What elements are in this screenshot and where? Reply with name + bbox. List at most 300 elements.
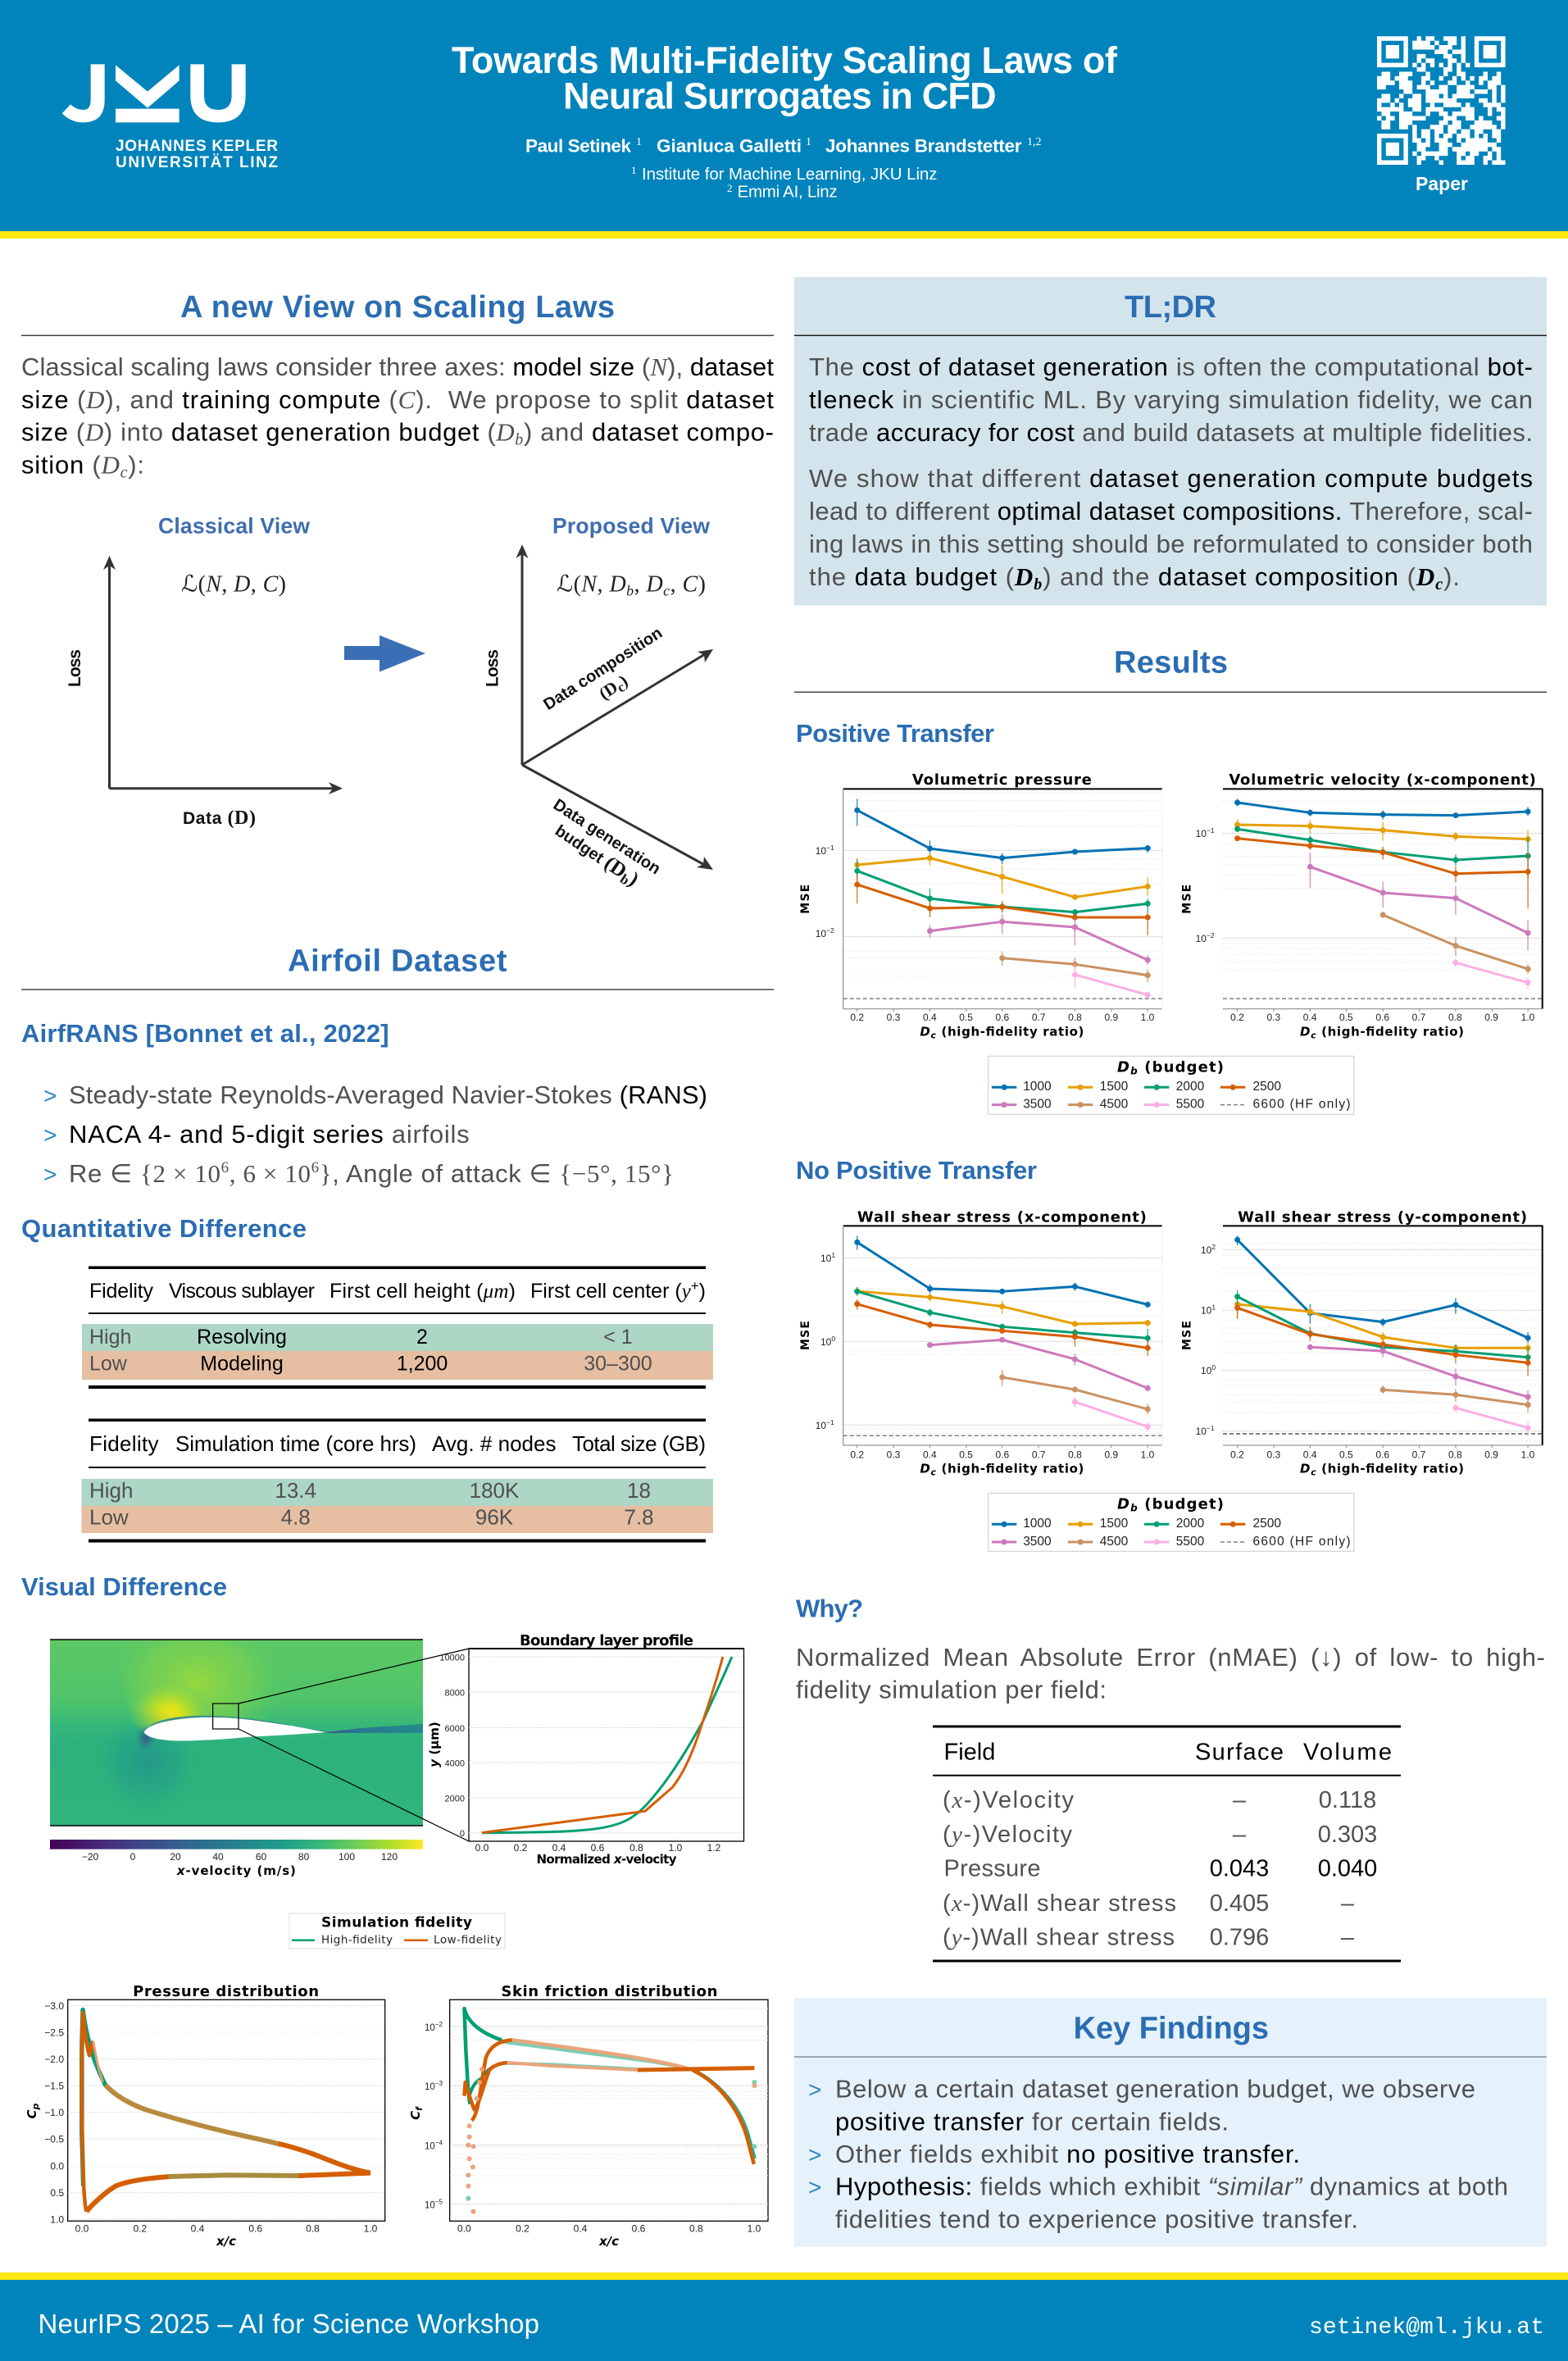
subheading: quantitative difference: Quantitative Difference — [21, 1214, 307, 1243]
bullet list: > — [43, 1122, 57, 1148]
chart: skin friction distribution: f — [414, 2106, 425, 2111]
bullet list: > — [808, 2142, 821, 2168]
chart: volumetric velocity: 0.2 — [1230, 1012, 1244, 1023]
chart: volumetric velocity: (high-fidelity ratio) — [1316, 1024, 1464, 1039]
chart: wall shear stress y: 1.0 — [1521, 1449, 1535, 1460]
legend: budget (positive transfer): 3500 — [1023, 1098, 1052, 1112]
diagram: proposed view: Loss — [484, 649, 502, 687]
subheading: no positive transfer: No Positive Transfer — [796, 1156, 1037, 1185]
chart: pressure distribution: 0.0 — [50, 2161, 64, 2172]
text block: lead to different optimal dataset compositions. Therefore, scal- — [809, 497, 1533, 525]
text block: c — [1435, 575, 1443, 594]
legend: budget (positive transfer): 1000 — [1023, 1080, 1052, 1094]
text block: intro: Classical scaling laws consider three axes: model size (N), dataset — [21, 353, 774, 381]
chart: wall shear stress y: 0.9 — [1484, 1449, 1498, 1460]
chart: pressure distribution: 0.6 — [248, 2223, 262, 2235]
footer banner — [0, 2272, 1568, 2361]
chart: pressure distribution — [25, 1983, 385, 2249]
table: mesh resolution: Fidelity — [89, 1280, 154, 1303]
text block: the data budget (D — [809, 562, 1033, 591]
chart: wall shear stress x: 0.2 — [850, 1449, 864, 1460]
legend: budget (no positive transfer): 3500 — [1023, 1535, 1052, 1549]
legend: budget (no positive transfer): 5500 — [1176, 1535, 1205, 1549]
heading: A new View on Scaling Laws — [180, 290, 615, 325]
chart: boundary layer profile: 0.6 — [591, 1842, 605, 1854]
table: nMAE per field: 0.303 — [1318, 1822, 1377, 1848]
chart: volumetric pressure: 0.5 — [959, 1012, 973, 1023]
affiliations — [631, 164, 938, 202]
chart: pressure distribution: 0.2 — [133, 2223, 147, 2235]
legend: budget (no positive transfer): 4500 — [1100, 1535, 1129, 1549]
chart: boundary layer profile: 4000 — [445, 1759, 465, 1769]
chart: wall shear stress x: 0.8 — [1068, 1449, 1082, 1460]
colorbar — [50, 1840, 423, 1878]
text block: intro: and dataset compo- — [540, 418, 774, 446]
legend: budget (positive transfer): 2000 — [1176, 1080, 1205, 1094]
chart: wall shear stress y: 0.5 — [1339, 1449, 1353, 1460]
chart: boundary layer profile: 2000 — [445, 1794, 465, 1804]
chart: wall shear stress y — [1180, 1209, 1543, 1478]
chart: wall shear stress y: D — [1300, 1462, 1316, 1478]
bullet list: NACA 4- and 5-digit series airfoils — [69, 1120, 470, 1149]
panel: TL;DR — [794, 277, 1547, 606]
chart: volumetric velocity: 0.4 — [1303, 1012, 1317, 1023]
chart: wall shear stress y: c — [1311, 1467, 1316, 1478]
chart: skin friction distribution: 0.4 — [574, 2223, 588, 2235]
legend: budget (no positive transfer): (budget) — [1139, 1496, 1224, 1513]
legend: budget (no positive transfer): 2500 — [1252, 1517, 1281, 1531]
chart: volumetric pressure: 0.4 — [923, 1012, 937, 1023]
chart: skin friction distribution: 0.6 — [632, 2223, 646, 2235]
chart: volumetric velocity: 0.3 — [1266, 1012, 1280, 1023]
title: Towards Multi-Fidelity Scaling Laws of — [452, 39, 1118, 81]
table: nMAE per field: Volume — [1303, 1740, 1392, 1766]
table: mesh resolution: Resolving — [197, 1326, 287, 1349]
icon: QR code — [1377, 39, 1506, 194]
diagram: proposed view: b — [626, 583, 634, 599]
panel: key findings — [794, 1998, 1547, 2247]
diagram: classical view: ℒ(N, D, C) — [181, 572, 286, 598]
chart: volumetric pressure: c — [930, 1030, 936, 1040]
title: Neural Surrogates in CFD — [563, 75, 997, 116]
table: nMAE per field: – — [1233, 1822, 1247, 1848]
chart: wall shear stress x: 0.9 — [1104, 1449, 1118, 1460]
chart: volumetric pressure: 0.2 — [850, 1012, 864, 1023]
chart: boundary layer profile: 0.0 — [475, 1842, 489, 1854]
table: simulation cost: Low — [89, 1505, 129, 1530]
chart: volumetric pressure: 10 — [816, 845, 826, 857]
bullet list: Hypothesis: fields which exhibit “similar” dynamics at both — [835, 2172, 1508, 2200]
text block: intro: b — [515, 431, 523, 449]
chart: volumetric velocity: 10 — [1196, 828, 1207, 839]
chart: volumetric velocity — [1180, 771, 1543, 1040]
legend: simulation fidelity: Low-fidelity — [434, 1934, 502, 1947]
panel: results — [794, 645, 1547, 1963]
chart: wall shear stress y: 0 — [1211, 1363, 1216, 1372]
chart: boundary layer profile: 8000 — [445, 1689, 465, 1699]
chart: wall shear stress y: 1 — [1211, 1303, 1216, 1312]
legend: budget (no positive transfer): 1500 — [1100, 1517, 1129, 1531]
chart: skin friction distribution: 0.2 — [516, 2223, 529, 2235]
heading: TL;DR — [1125, 290, 1216, 325]
table: mesh resolution: Low — [89, 1353, 128, 1376]
chart: boundary layer profile: 0.2 — [514, 1842, 528, 1854]
heading: Key Findings — [1074, 2012, 1269, 2046]
authors: Gianluca Galletti — [657, 136, 802, 157]
table: nMAE per field: 0.040 — [1318, 1856, 1377, 1882]
text block: b — [1034, 575, 1042, 594]
chart: pressure distribution: 0.4 — [191, 2223, 205, 2235]
chart: pressure distribution: −1.5 — [44, 2081, 64, 2092]
diagram: proposed view: Proposed View — [552, 513, 710, 538]
colorbar: 40 — [212, 1851, 224, 1863]
chart: boundary layer profile: 0.8 — [629, 1842, 643, 1854]
chart: wall shear stress x: 1.0 — [1141, 1449, 1155, 1460]
bullet list: Below a certain dataset generation budget, we observe — [835, 2074, 1475, 2104]
table: simulation cost: 7.8 — [624, 1505, 654, 1530]
colorbar: 120 — [381, 1851, 398, 1863]
text block: We show that different dataset generation compute budgets — [809, 464, 1533, 493]
chart: wall shear stress x: 0.4 — [923, 1449, 937, 1460]
legend: budget (no positive transfer): 1000 — [1023, 1517, 1052, 1531]
legend: budget (positive transfer): D — [1117, 1059, 1138, 1077]
chart: wall shear stress y: 0.7 — [1412, 1449, 1426, 1460]
panel: a new view on scaling laws — [21, 290, 774, 892]
table: mesh resolution — [82, 1266, 713, 1389]
chart: skin friction distribution: −5 — [435, 2199, 443, 2205]
chart: boundary layer profile: 0 — [460, 1829, 465, 1839]
table: nMAE per field: (x-)Velocity — [943, 1787, 1074, 1813]
icon: JKU logo: JOHANNES KEPLER — [116, 138, 278, 155]
chart: skin friction distribution: −3 — [435, 2080, 443, 2087]
chart: volumetric velocity: Volumetric velocity (x-component) — [1229, 771, 1536, 789]
diagram: classical view — [66, 513, 343, 829]
chart: skin friction distribution: x/c — [598, 2234, 619, 2249]
diagram: proposed view: C) — [683, 572, 706, 598]
chart: volumetric pressure: (high-fidelity ratio) — [937, 1024, 1084, 1039]
chart: pressure distribution: −1.0 — [44, 2107, 64, 2118]
legend: simulation fidelity — [289, 1913, 505, 1949]
legend: budget (positive transfer): 2500 — [1252, 1080, 1281, 1094]
heading: Airfoil Dataset — [288, 944, 507, 979]
bullet list: Re ∈ {2 × 10 — [69, 1159, 220, 1188]
text block: intro: sition (D — [21, 451, 120, 479]
chart: skin friction distribution: 10 — [425, 2082, 435, 2092]
table: nMAE per field: 0.405 — [1210, 1890, 1269, 1917]
chart: skin friction distribution: 0.8 — [689, 2223, 703, 2235]
bullet list: > — [43, 1083, 57, 1108]
text block: ) — [1043, 562, 1052, 591]
chart: volumetric pressure: 1.0 — [1141, 1012, 1155, 1023]
bullet list — [43, 1080, 707, 1188]
table: simulation cost: 4.8 — [281, 1505, 311, 1530]
chart: wall shear stress y: 10 — [1201, 1244, 1211, 1256]
chart: wall shear stress y: 2 — [1211, 1243, 1216, 1251]
text block — [809, 353, 1533, 594]
chart: wall shear stress y: 10 — [1201, 1305, 1211, 1317]
chart: wall shear stress x: 0.3 — [887, 1449, 901, 1460]
diagram: classical view: Data (D) — [183, 807, 256, 829]
chart: wall shear stress y: 0.8 — [1448, 1449, 1462, 1460]
diagram: proposed view: ) — [616, 671, 631, 690]
table: simulation cost: Fidelity — [89, 1431, 159, 1456]
chart: wall shear stress y: 0.6 — [1375, 1449, 1389, 1460]
legend: budget (no positive transfer): 6600 (HF only) — [1252, 1535, 1351, 1549]
chart: pressure distribution: −3.0 — [44, 2000, 64, 2012]
chart: skin friction distribution: −4 — [435, 2140, 443, 2146]
text block: intro: c — [120, 464, 128, 482]
text block: intro: size (D) into dataset generation budget (D — [21, 418, 515, 446]
subheading: why: Why? — [796, 1594, 863, 1623]
chart: wall shear stress x: 10 — [820, 1253, 831, 1264]
chart: volumetric velocity: D — [1300, 1024, 1316, 1040]
table: nMAE per field: 0.796 — [1210, 1925, 1269, 1951]
chart: wall shear stress x: 0.7 — [1032, 1449, 1046, 1460]
authors: 1,2 — [1027, 136, 1041, 148]
chart: pressure distribution: 1.0 — [50, 2213, 64, 2225]
title — [452, 39, 1118, 116]
table: simulation cost: Avg. # nodes — [432, 1431, 556, 1456]
colorbar: x-velocity (m/s) — [176, 1863, 296, 1878]
table: simulation cost: 18 — [627, 1478, 651, 1503]
bullet list: } — [320, 1159, 332, 1188]
inset box and zoom lines — [213, 1649, 469, 1841]
chart: skin friction distribution: 10 — [425, 2023, 435, 2033]
table: nMAE per field: Field — [944, 1740, 995, 1766]
chart: pressure distribution: Pressure distribution — [133, 1983, 319, 2000]
bullet list: positive transfer for certain fields. — [835, 2107, 1229, 2136]
diagram: classical view: Classical View — [158, 513, 310, 538]
chart: wall shear stress x: D — [920, 1462, 936, 1478]
table: nMAE per field: (x-)Wall shear stress — [943, 1890, 1176, 1917]
chart: boundary layer profile: 1.0 — [669, 1842, 683, 1854]
text block: and the dataset composition (D — [1060, 562, 1434, 591]
table: nMAE per field: (y-)Wall shear stress — [943, 1925, 1175, 1951]
colorbar: 20 — [170, 1851, 181, 1863]
affiliations: 1 — [631, 164, 636, 176]
chart: wall shear stress y: (high-fidelity ratio) — [1316, 1462, 1464, 1476]
table: mesh resolution: 30–300 — [584, 1353, 652, 1376]
bullet list: Other fields exhibit no positive transfer. — [835, 2140, 1300, 2168]
chart: volumetric velocity: 10 — [1196, 933, 1207, 944]
legend: budget (positive transfer) — [989, 1056, 1354, 1114]
chart: pressure distribution: C — [25, 2109, 39, 2118]
chart: wall shear stress x: 0.6 — [996, 1449, 1010, 1460]
table: mesh resolution: ) — [699, 1280, 706, 1303]
header banner — [0, 0, 1568, 239]
legend: budget (no positive transfer): b — [1130, 1503, 1138, 1514]
table: simulation cost: 180K — [470, 1478, 520, 1503]
legend: budget (positive transfer): 1500 — [1100, 1080, 1129, 1094]
chart: skin friction distribution: 10 — [425, 2200, 435, 2210]
text block: ing laws in this setting should be reformulated to consider both — [809, 530, 1533, 558]
text block: nMAE intro: fidelity simulation per field: — [796, 1676, 1107, 1704]
chart: skin friction distribution: 10 — [425, 2141, 435, 2151]
table: nMAE per field: Pressure — [944, 1856, 1041, 1882]
chart: pressure distribution: 0.0 — [75, 2223, 89, 2235]
chart: volumetric velocity: c — [1311, 1030, 1316, 1040]
chart: skin friction distribution: 0.0 — [457, 2223, 471, 2235]
colorbar: 100 — [339, 1851, 355, 1863]
chart: volumetric velocity: 0.9 — [1484, 1012, 1498, 1023]
diagram: proposed view: , — [670, 572, 682, 598]
chart: wall shear stress x: 0 — [831, 1335, 835, 1343]
chart: pressure distribution: 1.0 — [364, 2223, 378, 2235]
table: mesh resolution: Modeling — [200, 1353, 284, 1376]
heading: Results — [1114, 645, 1228, 680]
text block: intro: size (D), and training compute (C). We propose to split dataset — [21, 385, 774, 414]
chart: skin friction distribution — [408, 1983, 768, 2249]
chart: volumetric pressure: −2 — [826, 926, 834, 935]
chart: volumetric pressure: −1 — [826, 844, 834, 852]
bullet list: > — [808, 2174, 821, 2200]
chart: volumetric velocity: −1 — [1207, 826, 1215, 835]
subheading: positive transfer: Positive Transfer — [796, 719, 994, 748]
authors: 1 — [806, 136, 811, 148]
diagram: proposed view: D — [645, 572, 670, 599]
icon: JKU logo — [62, 64, 278, 171]
chart: volumetric pressure: 0.7 — [1032, 1012, 1046, 1023]
chart: wall shear stress x: (high-fidelity ratio) — [937, 1462, 1084, 1476]
chart: volumetric pressure: 0.6 — [996, 1012, 1010, 1023]
chart: boundary layer profile: 0.4 — [552, 1842, 566, 1854]
text block: ). — [1443, 562, 1460, 591]
chart: wall shear stress y: 0.3 — [1266, 1449, 1280, 1460]
chart: skin friction distribution: −2 — [435, 2021, 443, 2028]
chart: volumetric pressure: 0.3 — [887, 1012, 901, 1023]
arrow: classical to proposed — [344, 635, 425, 672]
diagram: proposed view: c — [614, 679, 628, 696]
chart: boundary layer profile: Normalized x-velocity — [536, 1852, 677, 1867]
diagram: proposed view: Data composition — [540, 624, 666, 714]
bullet list: Steady-state Reynolds-Averaged Navier-Stokes (RANS) — [69, 1080, 707, 1109]
diagram: proposed view — [484, 513, 713, 892]
chart: boundary layer profile: 6000 — [445, 1724, 465, 1734]
chart: pressure distribution: −2.5 — [44, 2027, 64, 2038]
bullet list: , Angle of attack ∈ {−5°, 15°} — [332, 1159, 674, 1188]
authors: Paul Setinek — [525, 136, 631, 157]
authors: Johannes Brandstetter — [825, 136, 1022, 157]
table: simulation cost: High — [89, 1478, 133, 1503]
subheading: airfrans: AirfRANS [Bonnet et al., 2022] — [21, 1019, 389, 1048]
chart: wall shear stress y: MSE — [1180, 1321, 1193, 1350]
table: mesh resolution: Viscous sublayer — [169, 1280, 315, 1303]
authors: 1 — [636, 136, 642, 148]
table: simulation cost — [82, 1418, 713, 1543]
table: mesh resolution: 2 — [416, 1326, 428, 1349]
subheading: visual difference: Visual Difference — [21, 1572, 227, 1601]
colorbar: 0 — [130, 1851, 136, 1863]
footer: conference: NeurIPS 2025 – AI for Science Workshop — [38, 2309, 539, 2339]
diagram: classical view: Loss — [66, 649, 84, 687]
diagram: proposed view: ) — [625, 868, 643, 891]
chart: pressure distribution: x/c — [216, 2234, 236, 2249]
table: nMAE per field: 0.118 — [1319, 1787, 1376, 1813]
chart: volumetric velocity: 0.6 — [1375, 1012, 1389, 1023]
chart: pressure distribution: −2.0 — [44, 2054, 64, 2065]
affiliations: 2 — [727, 182, 733, 194]
text block: nMAE intro: Normalized Mean Absolute Error (nMAE) (↓) of low- to high- — [796, 1643, 1545, 1672]
text block: intro: ): — [128, 451, 144, 479]
chart: volumetric pressure: Volumetric pressure — [912, 771, 1092, 789]
table: mesh resolution: High — [89, 1326, 131, 1349]
table: simulation cost: Total size (GB) — [572, 1431, 706, 1456]
chart: volumetric velocity: 1.0 — [1521, 1012, 1535, 1023]
colorbar: 80 — [298, 1851, 310, 1863]
chart: volumetric pressure: 0.9 — [1104, 1012, 1118, 1023]
diagram: proposed view: c — [663, 583, 670, 599]
chart: wall shear stress x: 0.5 — [959, 1449, 973, 1460]
diagram: proposed view: budget (D — [552, 821, 630, 883]
chart: wall shear stress x: 1 — [831, 1251, 835, 1259]
table: nMAE per field: – — [1233, 1787, 1247, 1813]
table: nMAE per field: – — [1341, 1890, 1355, 1917]
table: nMAE per field: 0.043 — [1210, 1856, 1269, 1882]
text block: intro — [21, 353, 774, 482]
bullet list: > — [43, 1162, 57, 1187]
chart: wall shear stress x: c — [930, 1467, 936, 1478]
diagram: proposed view: , — [634, 572, 646, 598]
chart: volumetric velocity: 0.5 — [1339, 1012, 1353, 1023]
legend: simulation fidelity: Simulation fidelity — [321, 1915, 472, 1931]
chart: volumetric pressure: MSE — [799, 885, 812, 914]
chart: skin friction distribution: 1.0 — [748, 2223, 761, 2235]
bullet list: > — [808, 2077, 821, 2102]
legend: budget (no positive transfer): 2000 — [1176, 1517, 1205, 1531]
chart: wall shear stress y: −1 — [1207, 1424, 1215, 1432]
table: nMAE per field: Surface — [1195, 1740, 1284, 1766]
footer: contact email: setinek@ml.jku.at — [1309, 2315, 1544, 2341]
chart: wall shear stress x: Wall shear stress (x-component) — [857, 1209, 1147, 1226]
text block: The cost of dataset generation is often the computational bot- — [809, 353, 1533, 381]
chart: wall shear stress x: 10 — [816, 1420, 826, 1431]
text block: trade accuracy for cost and build datasets at multiple fidelities. — [809, 418, 1533, 447]
diagram: proposed view: ℒ(N, D — [557, 572, 626, 598]
chart: boundary layer profile: y (μm) — [427, 1722, 442, 1767]
chart: boundary layer profile: 10000 — [439, 1653, 465, 1663]
chart: volumetric velocity: 0.7 — [1412, 1012, 1426, 1023]
chart: volumetric pressure: 0.8 — [1068, 1012, 1082, 1023]
table: mesh resolution: First cell center (y — [530, 1280, 691, 1303]
chart: pressure distribution: p — [30, 2103, 41, 2110]
bullet list: 6 — [311, 1159, 319, 1176]
text block: nMAE intro — [796, 1643, 1545, 1704]
table: simulation cost: Simulation time (core hrs) — [175, 1431, 416, 1456]
diagram: proposed view: b — [617, 871, 632, 889]
table: mesh resolution: + — [691, 1278, 699, 1294]
bullet list: , 6 × 10 — [230, 1159, 311, 1188]
legend: budget (no positive transfer): D — [1117, 1496, 1138, 1514]
chart: boundary layer profile: 1.2 — [707, 1842, 721, 1854]
chart: volumetric pressure — [799, 771, 1162, 1040]
table: mesh resolution: First cell height (μm) — [330, 1280, 516, 1303]
chart: skin friction distribution: Skin friction distribution — [501, 1983, 717, 2000]
icon: JKU logo: UNIVERSITÄT LINZ — [116, 154, 278, 171]
chart: boundary layer profile: Boundary layer profile — [520, 1632, 693, 1649]
table: simulation cost: 13.4 — [275, 1478, 316, 1503]
diagram: proposed view: Data generation — [550, 796, 664, 878]
chart: pressure distribution: −0.5 — [44, 2133, 64, 2145]
table: nMAE per field: (y-)Velocity — [943, 1822, 1072, 1848]
chart: wall shear stress x: 10 — [820, 1336, 831, 1348]
table: nMAE per field: – — [1341, 1925, 1355, 1951]
legend: budget (positive transfer): b — [1130, 1066, 1138, 1077]
table: simulation cost: 96K — [475, 1505, 514, 1530]
chart: volumetric pressure: 10 — [816, 928, 826, 939]
chart: wall shear stress x: −1 — [826, 1418, 834, 1426]
chart: boundary layer profile — [427, 1632, 744, 1867]
chart: wall shear stress y: 10 — [1196, 1426, 1207, 1437]
